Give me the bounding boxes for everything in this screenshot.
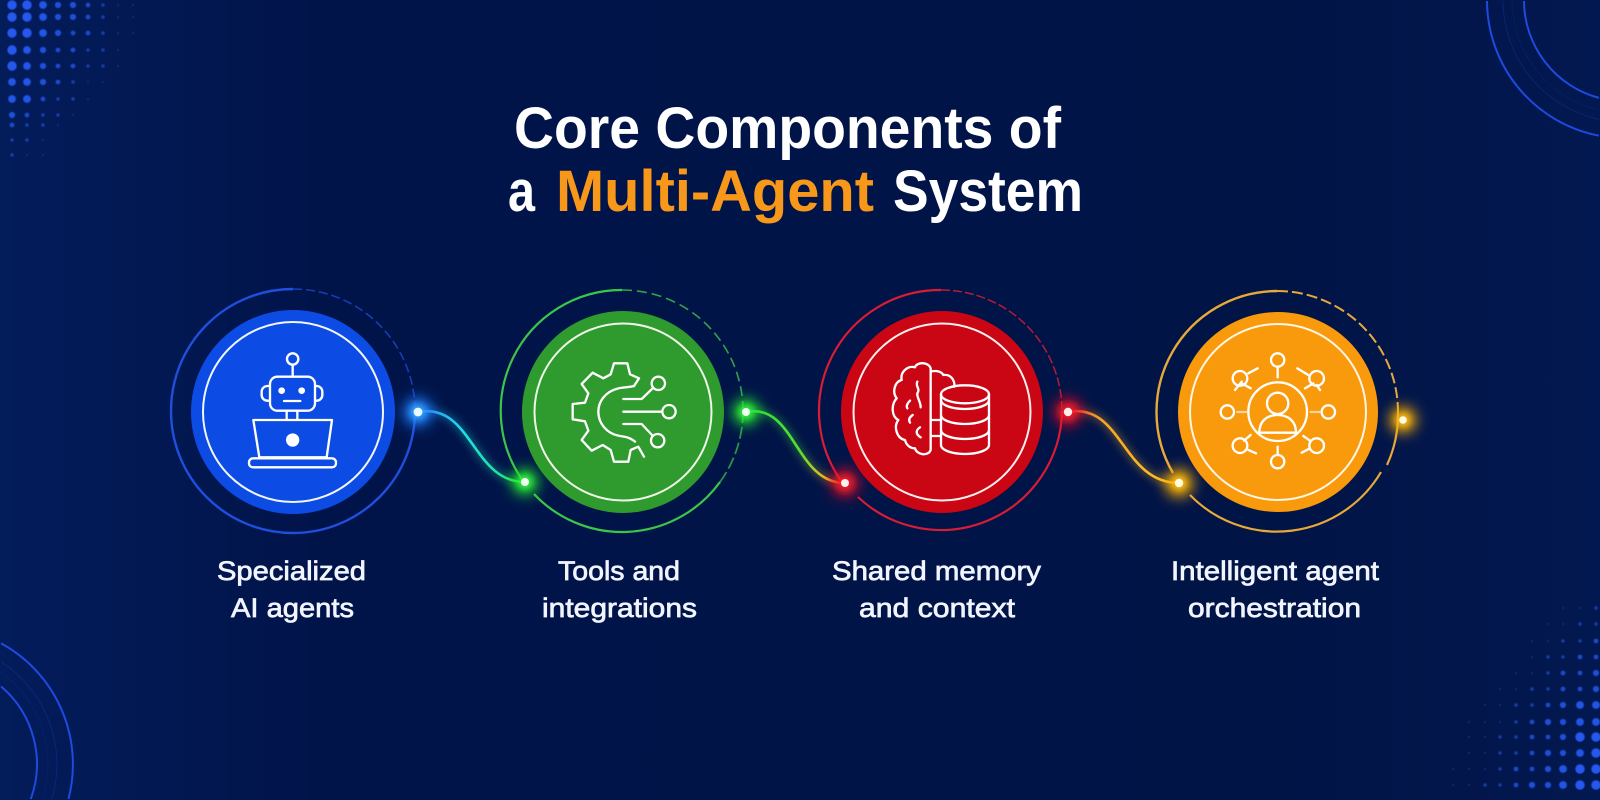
title: a	[508, 159, 536, 224]
node: red output	[1055, 399, 1081, 425]
inner ring: orange	[1190, 324, 1366, 500]
label: specialized AI agents: Specialized	[217, 556, 366, 586]
label: shared memory and context	[832, 556, 1042, 623]
disc: orange	[1178, 312, 1378, 512]
inner ring: green	[534, 324, 712, 500]
icon: agent network	[1221, 353, 1335, 468]
panel: intelligent agent orchestration	[1156, 291, 1398, 532]
outer ring: green	[501, 290, 743, 532]
label: specialized AI agents: AI agents	[231, 593, 354, 623]
panel: specialized AI agents	[171, 289, 415, 533]
label: specialized AI agents	[217, 556, 366, 623]
icon: robot with laptop	[249, 353, 336, 467]
disc: green	[522, 311, 724, 513]
panel: shared memory and context	[819, 290, 1062, 530]
label: intelligent agent orchestration: Intelligent agent	[1171, 556, 1380, 586]
connector: blue to green	[418, 411, 525, 482]
inner ring: red	[854, 324, 1030, 500]
title: Core Components of	[514, 96, 1062, 161]
icon: gear with circuit	[573, 363, 676, 462]
outer ring: orange	[1156, 291, 1398, 532]
label: intelligent agent orchestration	[1171, 556, 1380, 623]
title: Multi-Agent	[556, 159, 874, 224]
node: green output	[733, 399, 759, 425]
node: blue output	[404, 398, 432, 426]
node: green input	[512, 469, 538, 495]
halftone dots: bottom right	[1453, 608, 1596, 785]
node: orange output	[1390, 407, 1416, 433]
label: shared memory and context: Shared memory	[832, 556, 1042, 586]
label: shared memory and context: and context	[859, 593, 1016, 623]
panel: tools and integrations	[501, 290, 743, 532]
connector: green to red	[746, 411, 845, 483]
outer ring: blue	[171, 289, 415, 533]
icon: brain and database	[893, 363, 989, 454]
label: tools and integrations: Tools and	[558, 556, 680, 586]
label: tools and integrations	[542, 556, 697, 623]
disc: blue	[191, 310, 395, 514]
decorative rings: bottom left	[1, 643, 73, 799]
title	[508, 96, 1083, 224]
connector: red to orange	[1068, 411, 1179, 483]
node: red input	[832, 470, 858, 496]
decorative rings: top right	[1487, 1, 1599, 136]
node: orange input	[1165, 469, 1193, 497]
inner ring: blue	[203, 322, 383, 502]
title: System	[893, 159, 1083, 224]
label: intelligent agent orchestration: orchestration	[1188, 593, 1361, 623]
label: tools and integrations: integrations	[542, 593, 697, 623]
halftone dots: top left	[12, 5, 133, 155]
disc: red	[841, 311, 1043, 513]
outer ring: red	[819, 290, 1062, 530]
